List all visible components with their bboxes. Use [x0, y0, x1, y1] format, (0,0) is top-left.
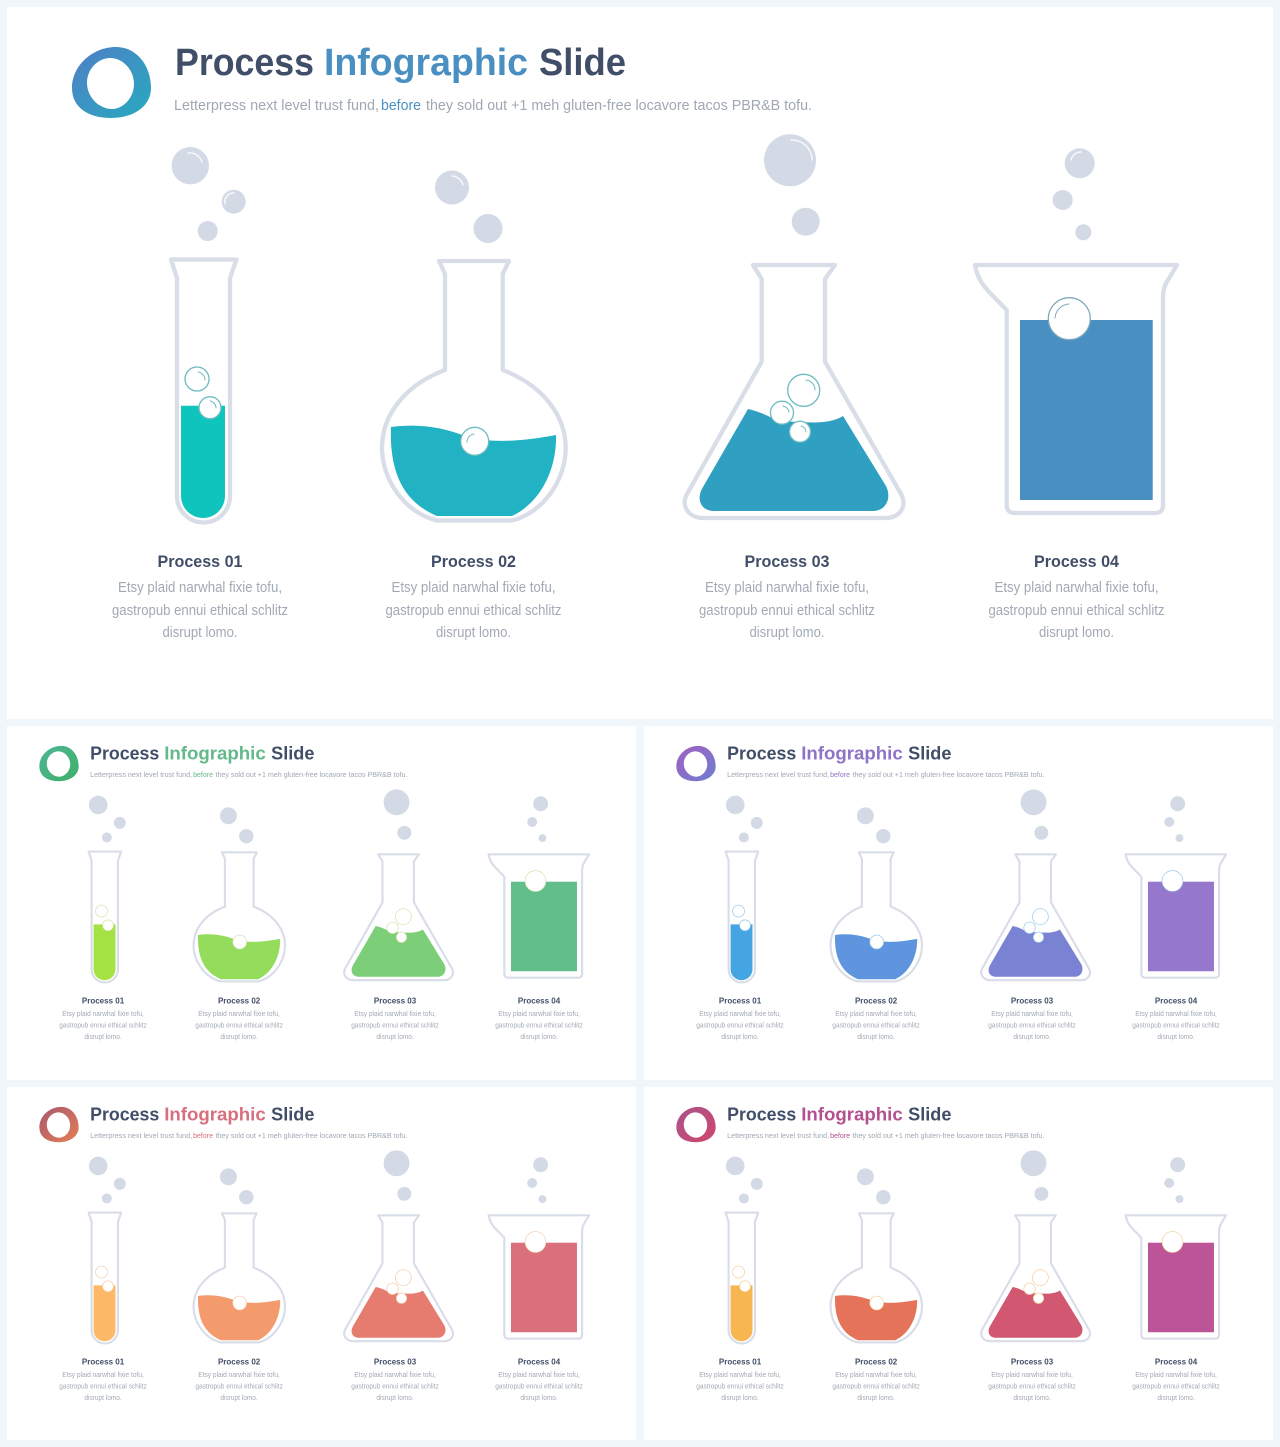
- label: process 02: Process 02: [431, 552, 516, 571]
- process 01: test tube: [89, 796, 126, 982]
- label: process 01: gastropub ennui ethical schlitz: [112, 603, 288, 619]
- label: process 02: gastropub ennui ethical schlitz: [832, 1020, 920, 1029]
- label: process 03: [699, 552, 875, 641]
- subtitle: [727, 1131, 1044, 1140]
- label: process 04: gastropub ennui ethical schlitz: [1132, 1381, 1220, 1390]
- label: process 02: gastropub ennui ethical schlitz: [832, 1381, 920, 1390]
- subtitle: before: [830, 770, 850, 779]
- label: process 01: disrupt lomo.: [721, 1393, 759, 1402]
- label: process 03: gastropub ennui ethical schlitz: [988, 1020, 1076, 1029]
- process 02: round flask: [194, 807, 285, 981]
- title: Infographic: [164, 1104, 266, 1125]
- label: process 03: Etsy plaid narwhal fixie tofu,: [991, 1370, 1073, 1379]
- label: process 01: Process 01: [158, 552, 242, 571]
- label: process 02: Etsy plaid narwhal fixie tofu,: [198, 1009, 280, 1018]
- subtitle: Letterpress next level trust fund,: [727, 770, 829, 779]
- label: process 01: Etsy plaid narwhal fixie tofu,: [62, 1370, 144, 1379]
- label: process 02: [386, 552, 562, 641]
- label: process 03: Etsy plaid narwhal fixie tofu,: [354, 1009, 436, 1018]
- title: Infographic: [801, 743, 903, 764]
- label: process 03: disrupt lomo.: [376, 1032, 414, 1041]
- label: process 04: [988, 552, 1164, 641]
- label: process 04: Etsy plaid narwhal fixie tofu,: [498, 1009, 580, 1018]
- title: [175, 42, 626, 84]
- label: process 03: Etsy plaid narwhal fixie tofu,: [705, 580, 869, 596]
- label: process 02: [195, 1357, 283, 1402]
- subtitle: [90, 1131, 407, 1140]
- label: process 01: disrupt lomo.: [721, 1032, 759, 1041]
- process 03: conical flask: [981, 1150, 1090, 1341]
- process 03: conical flask: [344, 789, 453, 980]
- label: process 02: Process 02: [218, 1357, 261, 1367]
- label: process 04: gastropub ennui ethical schlitz: [495, 1381, 583, 1390]
- label: process 04: disrupt lomo.: [1039, 625, 1114, 641]
- logo ring: [72, 47, 151, 118]
- label: process 02: [832, 996, 920, 1041]
- label: process 04: gastropub ennui ethical schlitz: [1132, 1020, 1220, 1029]
- process 02: round flask: [831, 807, 922, 981]
- label: process 04: disrupt lomo.: [520, 1393, 558, 1402]
- title: Slide: [271, 1104, 314, 1125]
- title: Slide: [539, 42, 626, 84]
- subtitle: [174, 97, 812, 114]
- label: process 01: Process 01: [719, 1357, 761, 1367]
- label: process 02: disrupt lomo.: [857, 1393, 895, 1402]
- subtitle: before: [193, 770, 213, 779]
- label: process 03: Process 03: [1011, 996, 1053, 1006]
- title: Process: [90, 743, 159, 764]
- label: process 03: [988, 996, 1076, 1041]
- process 04: beaker: [489, 796, 589, 978]
- process 04: beaker: [1126, 796, 1226, 978]
- label: process 01: gastropub ennui ethical schlitz: [59, 1020, 147, 1029]
- process 03: conical flask: [981, 789, 1090, 980]
- label: process 01: Etsy plaid narwhal fixie tofu,: [699, 1009, 781, 1018]
- title: Infographic: [324, 42, 528, 84]
- label: process 01: disrupt lomo.: [84, 1032, 122, 1041]
- label: process 04: gastropub ennui ethical schlitz: [988, 603, 1164, 619]
- label: process 02: Etsy plaid narwhal fixie tofu,: [835, 1370, 917, 1379]
- title: [727, 1104, 951, 1125]
- panel: green slide: [7, 726, 636, 1080]
- label: process 03: disrupt lomo.: [376, 1393, 414, 1402]
- label: process 02: Etsy plaid narwhal fixie tofu,: [198, 1370, 280, 1379]
- label: process 04: Process 04: [1155, 1357, 1197, 1367]
- label: process 02: Process 02: [855, 996, 898, 1006]
- label: process 01: disrupt lomo.: [84, 1393, 122, 1402]
- label: process 02: disrupt lomo.: [220, 1032, 258, 1041]
- label: process 01: [696, 996, 784, 1041]
- title: Slide: [908, 743, 951, 764]
- process 01: test tube: [171, 147, 246, 522]
- label: process 02: Etsy plaid narwhal fixie tofu,: [835, 1009, 917, 1018]
- label: process 04: [1132, 1357, 1220, 1402]
- label: process 03: Process 03: [744, 552, 830, 571]
- title: Infographic: [164, 743, 266, 764]
- subtitle: Letterpress next level trust fund,: [727, 1131, 829, 1140]
- label: process 04: Process 04: [518, 1357, 560, 1367]
- label: process 02: Etsy plaid narwhal fixie tofu,: [392, 580, 556, 596]
- label: process 03: gastropub ennui ethical schlitz: [699, 603, 875, 619]
- label: process 03: Process 03: [374, 1357, 416, 1367]
- logo ring: [676, 1107, 716, 1142]
- subtitle: they sold out +1 meh gluten-free locavore tacos PBR&B tofu.: [426, 97, 812, 114]
- subtitle: [90, 770, 407, 779]
- label: process 01: disrupt lomo.: [162, 625, 238, 641]
- label: process 01: Etsy plaid narwhal fixie tofu,: [62, 1009, 144, 1018]
- label: process 01: gastropub ennui ethical schlitz: [59, 1381, 147, 1390]
- label: process 02: [832, 1357, 920, 1402]
- label: process 04: gastropub ennui ethical schlitz: [495, 1020, 583, 1029]
- label: process 03: Etsy plaid narwhal fixie tofu,: [354, 1370, 436, 1379]
- process 03: conical flask: [344, 1150, 453, 1341]
- label: process 04: Etsy plaid narwhal fixie tofu,: [1135, 1009, 1217, 1018]
- label: process 03: disrupt lomo.: [1013, 1032, 1051, 1041]
- subtitle: before: [830, 1131, 850, 1140]
- label: process 03: [988, 1357, 1076, 1402]
- label: process 02: [195, 996, 283, 1041]
- process 02: round flask: [831, 1168, 922, 1342]
- label: process 03: [351, 996, 439, 1041]
- process 01: test tube: [726, 796, 763, 982]
- process 02: round flask: [194, 1168, 285, 1342]
- logo ring: [39, 746, 79, 781]
- label: process 03: gastropub ennui ethical schlitz: [351, 1381, 439, 1390]
- label: process 02: gastropub ennui ethical schlitz: [195, 1381, 283, 1390]
- label: process 02: gastropub ennui ethical schlitz: [386, 603, 562, 619]
- label: process 02: disrupt lomo.: [857, 1032, 895, 1041]
- label: process 04: [1132, 996, 1220, 1041]
- label: process 01: [59, 1357, 147, 1402]
- process 01: test tube: [726, 1157, 763, 1343]
- label: process 03: Process 03: [1011, 1357, 1053, 1367]
- label: process 04: [495, 1357, 583, 1402]
- title: Process: [727, 1104, 796, 1125]
- panel: main blue slide: [7, 7, 1273, 719]
- title: [90, 1104, 314, 1125]
- label: process 04: disrupt lomo.: [520, 1032, 558, 1041]
- logo ring: [676, 746, 716, 781]
- label: process 01: [696, 1357, 784, 1402]
- title: Process: [90, 1104, 159, 1125]
- label: process 04: Process 04: [518, 996, 560, 1006]
- label: process 01: Process 01: [82, 1357, 124, 1367]
- subtitle: they sold out +1 meh gluten-free locavore tacos PBR&B tofu.: [852, 770, 1044, 779]
- title: Infographic: [801, 1104, 903, 1125]
- process 01: test tube: [89, 1157, 126, 1343]
- subtitle: before: [381, 97, 421, 114]
- label: process 04: Process 04: [1034, 552, 1120, 571]
- label: process 03: disrupt lomo.: [750, 625, 824, 641]
- title: [727, 743, 951, 764]
- process 04: beaker: [489, 1157, 589, 1339]
- label: process 01: Process 01: [719, 996, 761, 1006]
- subtitle: [727, 770, 1044, 779]
- label: process 01: Etsy plaid narwhal fixie tofu,: [699, 1370, 781, 1379]
- subtitle: Letterpress next level trust fund,: [174, 97, 379, 114]
- panel: coral slide: [7, 1087, 636, 1440]
- label: process 01: Etsy plaid narwhal fixie tofu,: [118, 580, 282, 596]
- title: Slide: [271, 743, 314, 764]
- title: Process: [175, 42, 314, 84]
- label: process 02: disrupt lomo.: [436, 625, 511, 641]
- label: process 04: Etsy plaid narwhal fixie tofu,: [994, 580, 1158, 596]
- title: Slide: [908, 1104, 951, 1125]
- title: [90, 743, 314, 764]
- label: process 02: Process 02: [218, 996, 261, 1006]
- label: process 01: gastropub ennui ethical schlitz: [696, 1020, 784, 1029]
- title: Process: [727, 743, 796, 764]
- process 02: round flask: [382, 170, 566, 520]
- subtitle: they sold out +1 meh gluten-free locavore tacos PBR&B tofu.: [215, 1131, 407, 1140]
- label: process 04: disrupt lomo.: [1157, 1393, 1195, 1402]
- label: process 02: disrupt lomo.: [220, 1393, 258, 1402]
- label: process 03: gastropub ennui ethical schlitz: [351, 1020, 439, 1029]
- process 04: beaker: [975, 148, 1177, 513]
- logo ring: [39, 1107, 79, 1142]
- label: process 04: Etsy plaid narwhal fixie tofu,: [1135, 1370, 1217, 1379]
- label: process 03: disrupt lomo.: [1013, 1393, 1051, 1402]
- label: process 04: Etsy plaid narwhal fixie tofu,: [498, 1370, 580, 1379]
- subtitle: they sold out +1 meh gluten-free locavore tacos PBR&B tofu.: [215, 770, 407, 779]
- label: process 04: Process 04: [1155, 996, 1197, 1006]
- label: process 03: gastropub ennui ethical schlitz: [988, 1381, 1076, 1390]
- process 04: beaker: [1126, 1157, 1226, 1339]
- label: process 03: [351, 1357, 439, 1402]
- panel: magenta slide: [644, 1087, 1273, 1440]
- subtitle: they sold out +1 meh gluten-free locavore tacos PBR&B tofu.: [852, 1131, 1044, 1140]
- subtitle: Letterpress next level trust fund,: [90, 770, 192, 779]
- label: process 01: [59, 996, 147, 1041]
- label: process 02: Process 02: [855, 1357, 898, 1367]
- label: process 01: Process 01: [82, 996, 124, 1006]
- panel: purple slide: [644, 726, 1273, 1080]
- label: process 01: [112, 552, 288, 641]
- label: process 04: [495, 996, 583, 1041]
- label: process 03: Etsy plaid narwhal fixie tofu,: [991, 1009, 1073, 1018]
- subtitle: Letterpress next level trust fund,: [90, 1131, 192, 1140]
- label: process 01: gastropub ennui ethical schlitz: [696, 1381, 784, 1390]
- subtitle: before: [193, 1131, 213, 1140]
- label: process 04: disrupt lomo.: [1157, 1032, 1195, 1041]
- label: process 03: Process 03: [374, 996, 416, 1006]
- process 03: conical flask: [685, 134, 903, 518]
- label: process 02: gastropub ennui ethical schlitz: [195, 1020, 283, 1029]
